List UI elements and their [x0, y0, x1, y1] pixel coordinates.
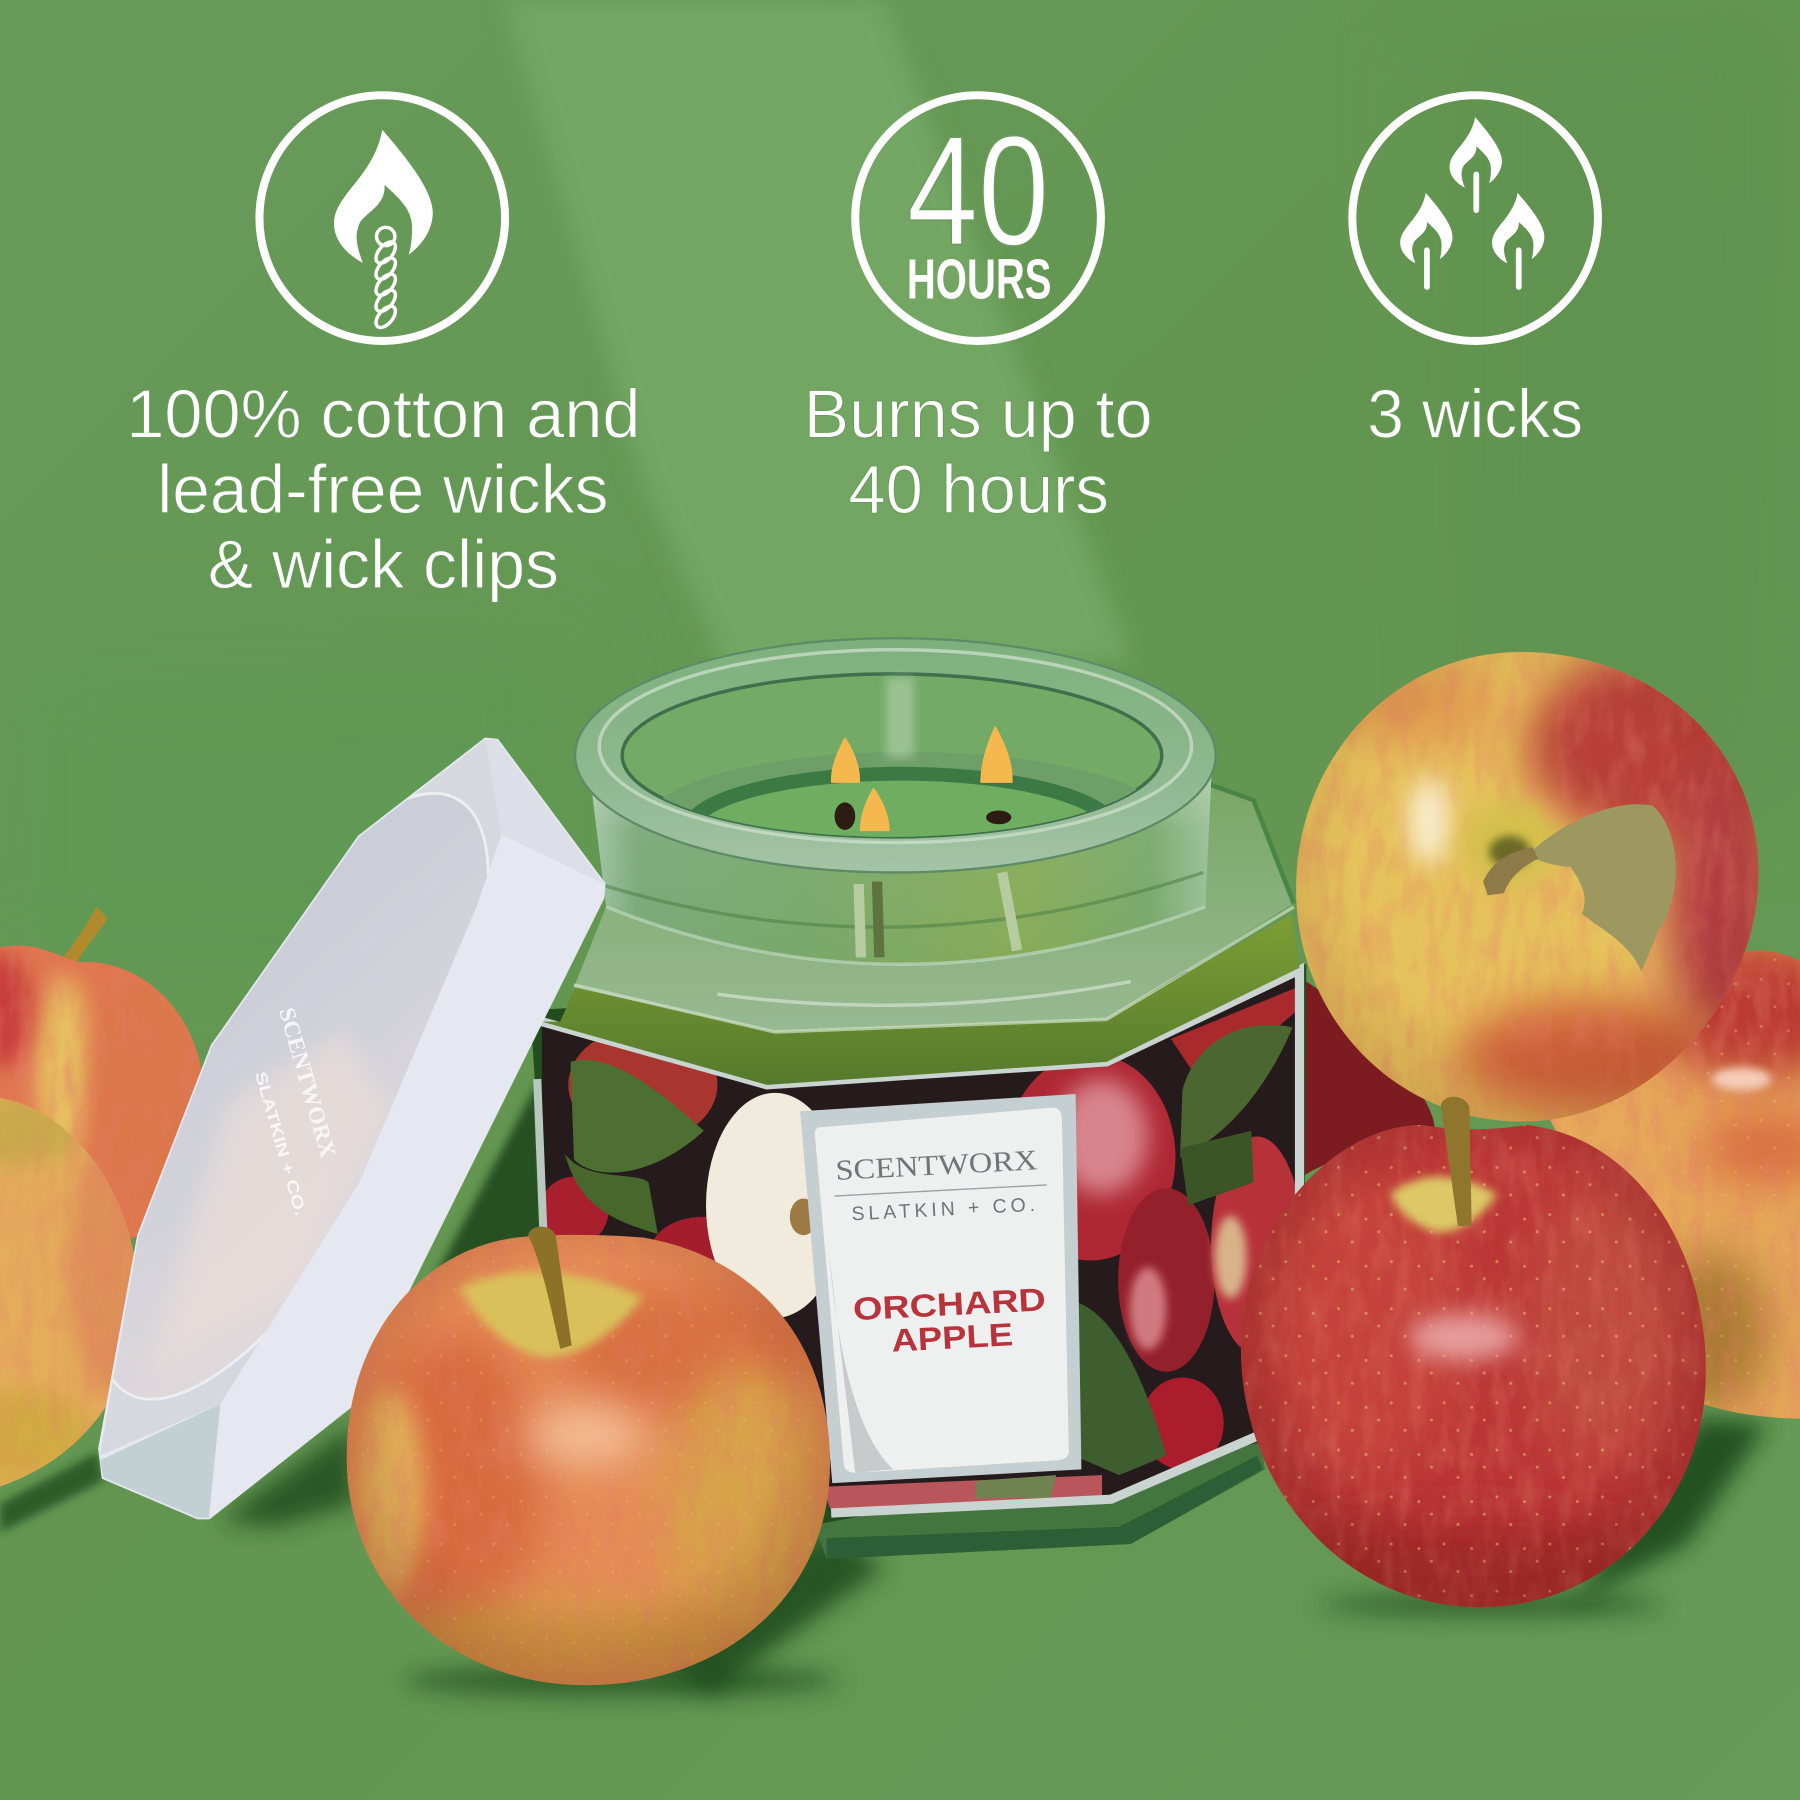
floor shadows — [0, 1418, 1768, 1697]
brand: SCENTWORX — [835, 1144, 1038, 1187]
candle jar — [517, 638, 1320, 1559]
jar shadow side — [436, 1079, 551, 1320]
stem — [1441, 1097, 1472, 1226]
wick tips — [835, 802, 1011, 830]
apple: right top with leaf — [1296, 652, 1759, 1122]
lid top face — [100, 740, 502, 1456]
brand — [832, 1144, 1055, 1361]
caption: burn time: 40 hours — [848, 451, 1109, 528]
stem — [1483, 847, 1538, 895]
icon: cotton wick flame — [259, 95, 505, 341]
jar neck — [588, 758, 1212, 964]
brand: APPLE — [891, 1316, 1014, 1359]
flames — [831, 726, 1013, 831]
icon: three wicks — [1352, 95, 1598, 341]
wax surface — [662, 752, 1136, 837]
apple: front centre — [333, 1217, 838, 1699]
apple: front left — [0, 1098, 134, 1486]
caption: burn time: Burns up to — [804, 375, 1153, 452]
icon: 40 hours: 40 — [907, 105, 1049, 279]
brand: ORCHARD — [852, 1281, 1047, 1327]
apple: back left — [0, 907, 202, 1238]
apple: right back — [1538, 941, 1800, 1423]
olive wax band — [542, 915, 1299, 1085]
caption: cotton wicks: lead-free wicks — [157, 451, 608, 528]
caption: three wicks: 3 wicks — [1367, 375, 1583, 452]
front label — [800, 1094, 1081, 1483]
brand: SLATKIN + CO. — [851, 1194, 1036, 1225]
shoulder glass — [574, 783, 1294, 1032]
caption: cotton wicks: & wick clips — [208, 526, 559, 603]
caption: burn time — [804, 375, 1153, 528]
apple: behind jar right — [1297, 976, 1435, 1177]
icon: 40 hours — [855, 95, 1101, 341]
wax side — [530, 964, 1306, 1527]
lid embossed text — [251, 1005, 341, 1218]
leaf — [1527, 804, 1676, 971]
lid embossed text: SCENTWORX — [274, 1005, 341, 1161]
lid — [98, 738, 606, 1520]
label wrap artwork — [542, 977, 1295, 1510]
caption: cotton wicks: 100% cotton and — [126, 375, 641, 452]
apple: right front — [1234, 1097, 1716, 1619]
silver band — [542, 970, 1299, 1513]
stem — [528, 1227, 572, 1349]
jar rim — [575, 638, 1216, 872]
lid embossed text: SLATKIN + CO. — [251, 1069, 309, 1218]
caption: cotton wicks — [126, 375, 641, 603]
jar base — [804, 1423, 1265, 1559]
refracted wicks — [859, 872, 1017, 957]
icon: 40 hours: HOURS — [907, 247, 1052, 310]
